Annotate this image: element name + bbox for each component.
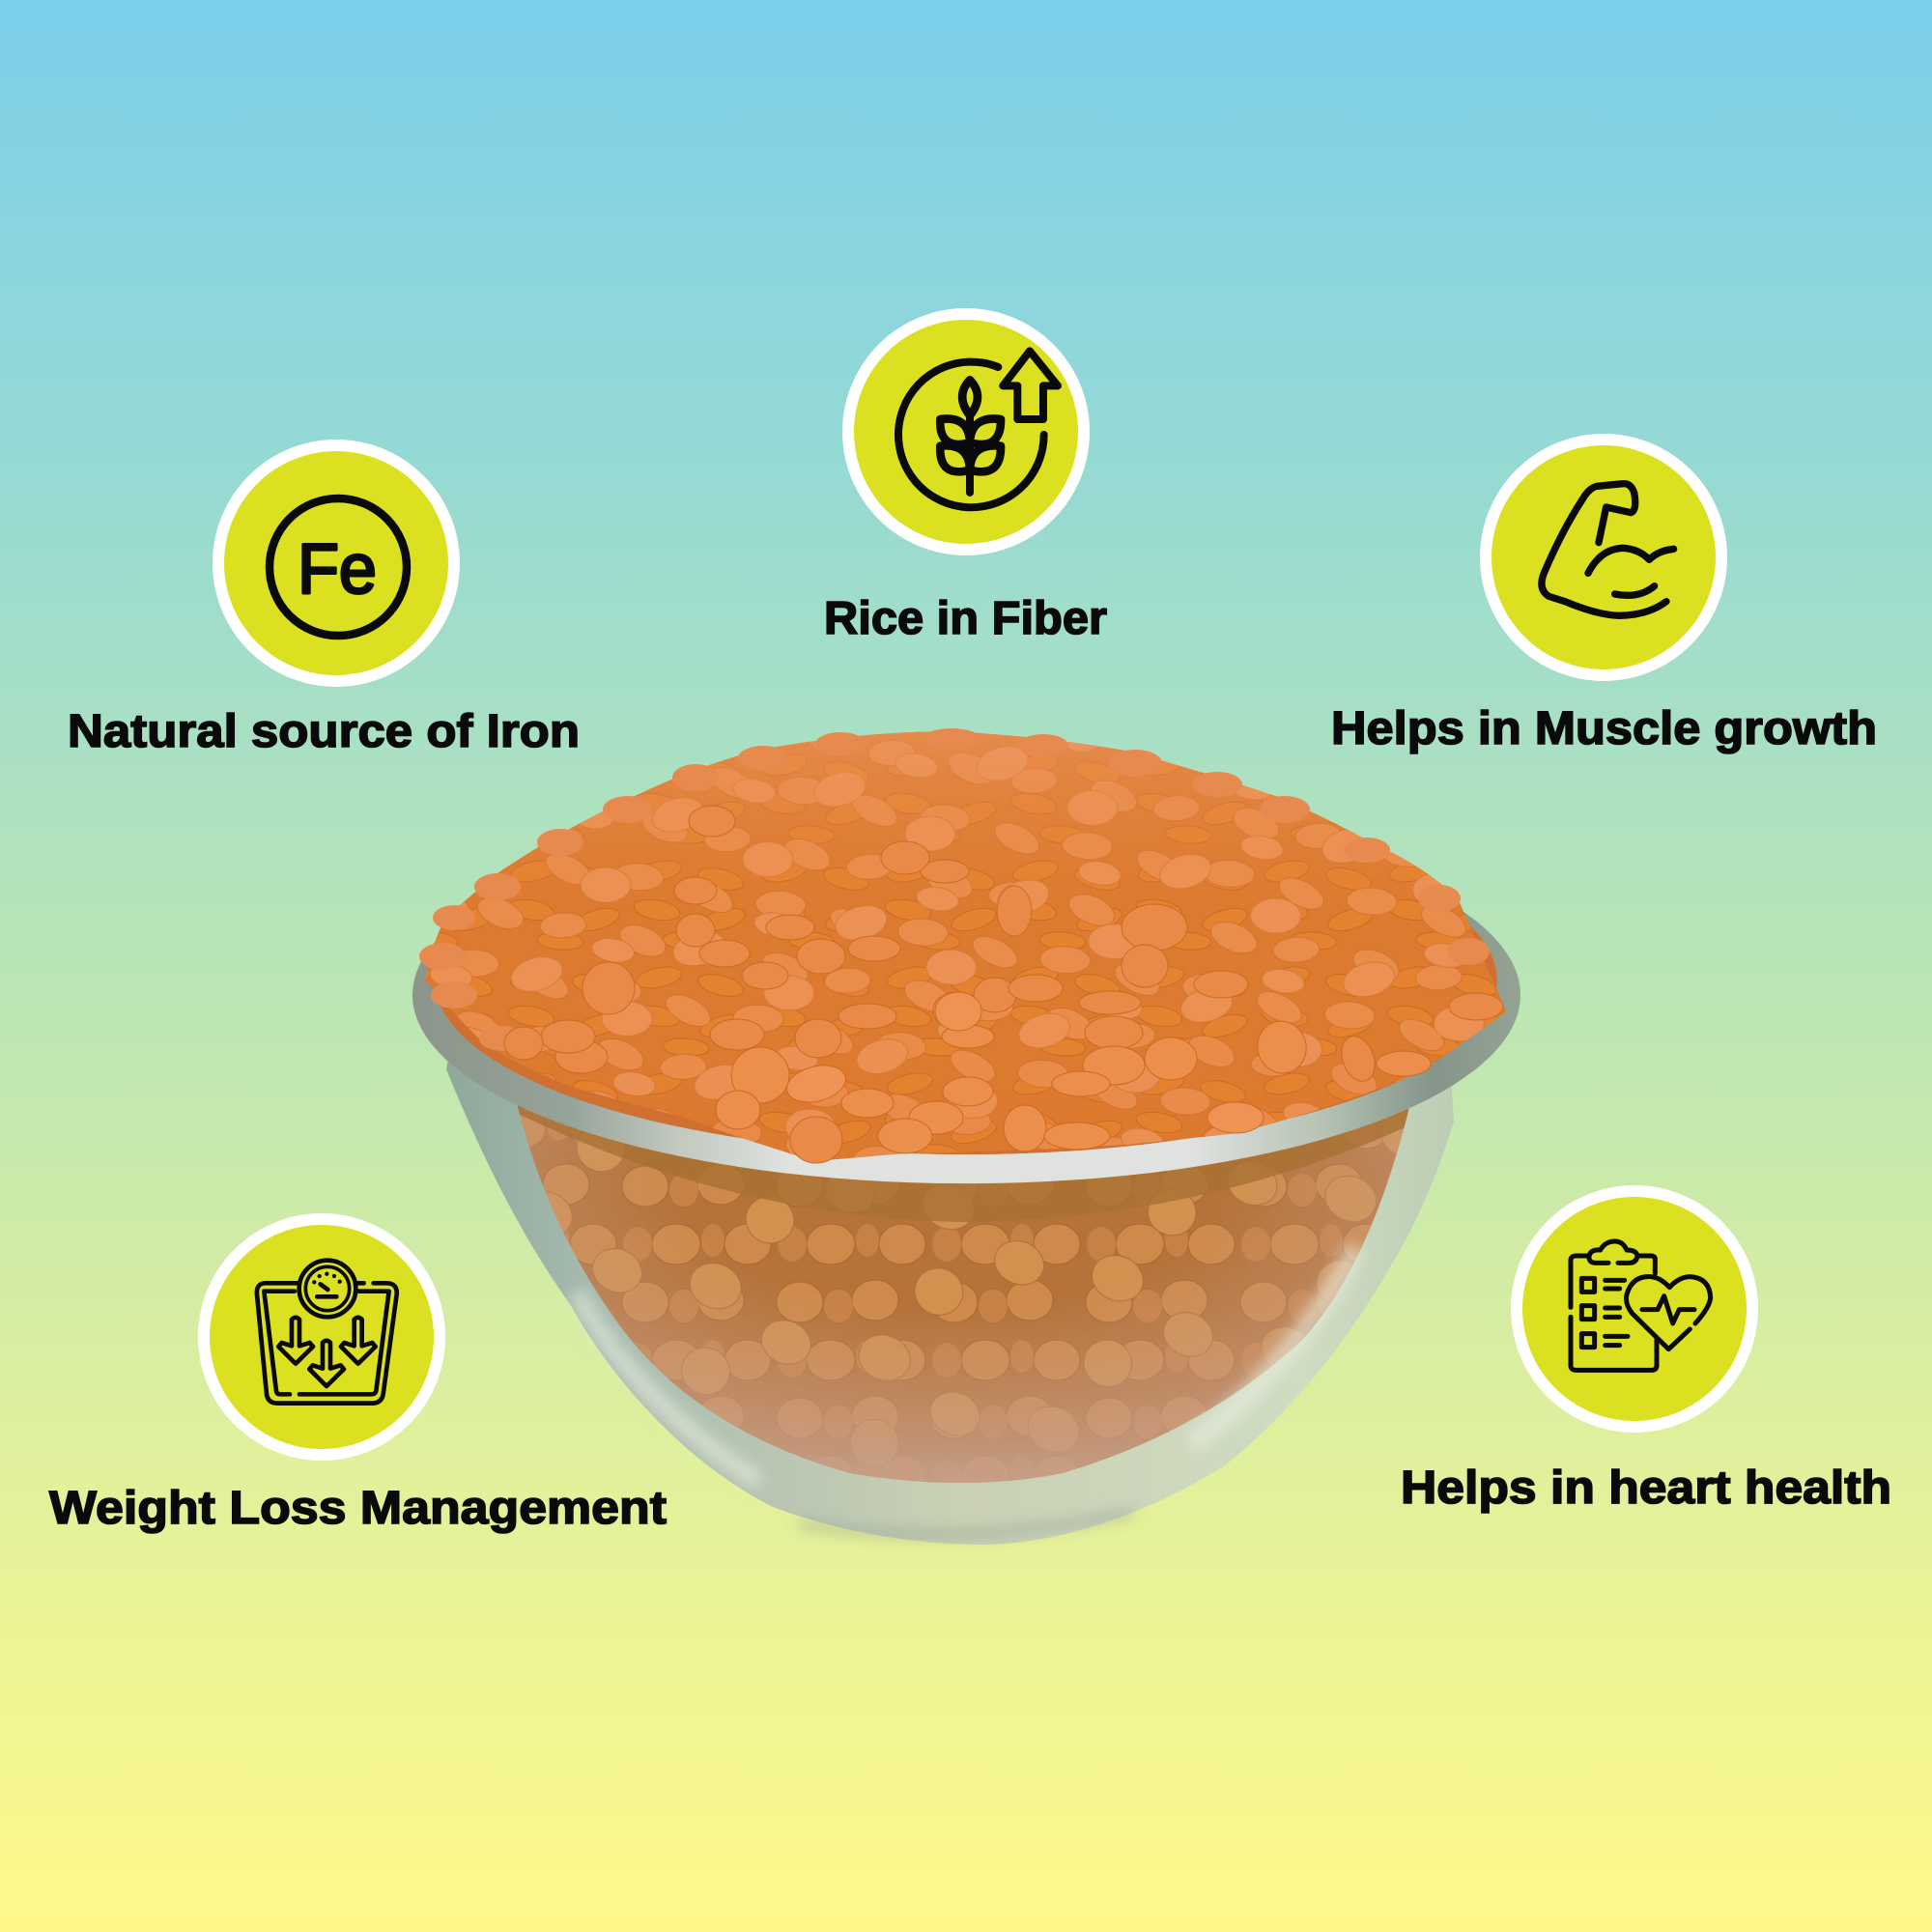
- lentil mound: [415, 724, 1517, 1169]
- lentil on right rim: [1208, 1102, 1264, 1133]
- benefit: weight loss management: [49, 1219, 667, 1534]
- icon circle: scale: [204, 1219, 440, 1455]
- label: Weight Loss Management: [49, 1483, 667, 1534]
- icon circle: Fe: [218, 445, 454, 681]
- icon circle: wheat: [848, 314, 1084, 550]
- label: Helps in heart health: [1401, 1463, 1891, 1514]
- mound edge bumps: [419, 728, 1490, 1051]
- label: Rice in Fiber: [824, 593, 1107, 644]
- label: Helps in Muscle growth: [1331, 703, 1877, 754]
- icon circle: muscle: [1486, 440, 1721, 675]
- benefit: heart health: [1401, 1191, 1891, 1514]
- icon: iron ring: [270, 498, 407, 636]
- label: Natural source of Iron: [68, 706, 580, 757]
- icon: weighing scale with arrows: [257, 1261, 397, 1404]
- icon: wheat with up arrow: [898, 351, 1058, 507]
- benefit: natural source of iron: [68, 445, 580, 757]
- benefit: rice in fiber: [824, 314, 1107, 644]
- bowl glass body: [446, 1024, 1454, 1545]
- stray lentil on rim: [790, 1117, 842, 1163]
- illustration: glass bowl of red lentils: [412, 724, 1520, 1545]
- benefit: muscle growth: [1331, 440, 1877, 754]
- icon text: Fe: Fe: [298, 530, 377, 609]
- icon circle: heart: [1517, 1191, 1752, 1427]
- rim interior fill: [435, 807, 1497, 1154]
- icon: clipboard with heart: [1571, 1241, 1711, 1370]
- bowl highlights: [580, 1256, 1352, 1535]
- lentils seen through glass: [518, 1082, 1409, 1483]
- icon: flexed arm: [1542, 484, 1674, 615]
- bowl rim: [412, 807, 1520, 1183]
- large front lentils: [504, 806, 1503, 1153]
